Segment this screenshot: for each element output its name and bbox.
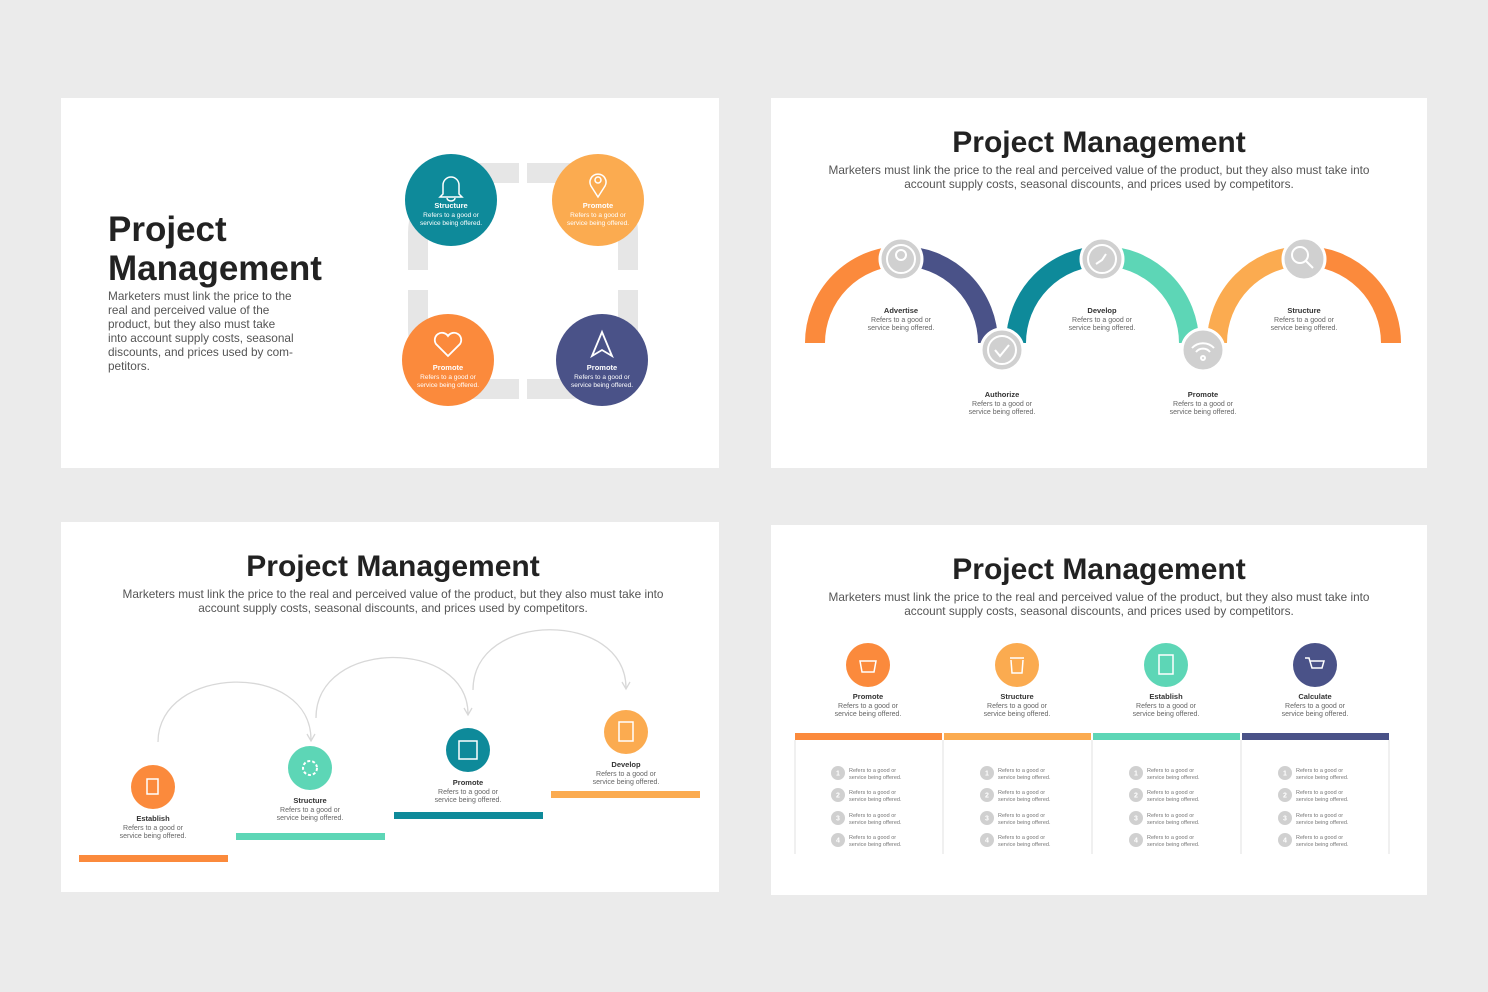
text block: product, but they also must take <box>108 317 276 331</box>
circle: structure: Refers to a good or <box>423 212 480 219</box>
circle: promote pin: service being offered. <box>567 220 629 227</box>
panel: arcs: Authorize <box>985 390 1019 399</box>
subtitle: Marketers must link the price to the real and perceived value of the product, but they also must take into <box>829 163 1370 177</box>
panel: table: Refers to a good or <box>987 703 1048 710</box>
panel: steps: Refers to a good or <box>280 807 341 814</box>
list items: service being offered. <box>1296 820 1349 826</box>
panel: arcs: Develop <box>1087 306 1117 315</box>
list items: service being offered. <box>1147 820 1200 826</box>
panel: arcs: Promote <box>1188 390 1218 399</box>
panel: steps: Refers to a good or <box>123 825 184 832</box>
panel: cycle: Management <box>108 249 322 288</box>
column icons <box>846 643 1337 687</box>
list items: 4 <box>985 838 989 844</box>
panel: arcs: Refers to a good or <box>972 401 1033 408</box>
panel: steps: Promote <box>453 778 483 787</box>
panel: arcs: service being offered. <box>1170 409 1236 416</box>
panel: table: Refers to a good or <box>1136 703 1197 710</box>
panel: table: service being offered. <box>1282 711 1348 718</box>
list items: service being offered. <box>849 797 902 803</box>
list items: service being offered. <box>849 820 902 826</box>
list items: Refers to a good or <box>998 813 1045 819</box>
step bars <box>79 855 228 862</box>
list items: 2 <box>836 792 840 800</box>
panel: steps: service being offered. <box>593 779 659 786</box>
subtitle: Marketers must link the price to the real and perceived value of the product, but they also must take into <box>123 587 664 601</box>
panel: arcs: service being offered. <box>969 409 1035 416</box>
list items: service being offered. <box>1147 842 1200 848</box>
list items: 2 <box>1134 792 1138 800</box>
list items: Refers to a good or <box>1147 813 1194 819</box>
list items: Refers to a good or <box>1147 768 1194 774</box>
list items: service being offered. <box>1147 797 1200 803</box>
list items: 3 <box>985 816 989 822</box>
panel: steps: service being offered. <box>435 797 501 804</box>
list items: service being offered. <box>1147 775 1200 781</box>
circle: structure: service being offered. <box>420 220 482 227</box>
circle: structure: Structure <box>434 201 468 210</box>
panel: arcs <box>771 98 1427 468</box>
panel: arcs: Refers to a good or <box>1274 317 1335 324</box>
grey ring <box>400 150 650 410</box>
circle: promote pin: Refers to a good or <box>570 212 627 219</box>
panel: table: Structure <box>1000 692 1034 701</box>
subtitle: account supply costs, seasonal discounts, and prices used by competitors. <box>904 177 1294 191</box>
panel: table: service being offered. <box>835 711 901 718</box>
list items: service being offered. <box>998 797 1051 803</box>
list items: Refers to a good or <box>849 790 896 796</box>
list items: service being offered. <box>1296 842 1349 848</box>
list items: Refers to a good or <box>1296 768 1343 774</box>
list items: 1 <box>836 770 840 778</box>
circle: promote pin: Promote <box>583 201 613 210</box>
panel: arcs: Refers to a good or <box>1173 401 1234 408</box>
panel: table: Refers to a good or <box>1285 703 1346 710</box>
panel: table: Calculate <box>1298 692 1332 701</box>
list items: Refers to a good or <box>998 790 1045 796</box>
subtitle: Marketers must link the price to the real and perceived value of the product, but they also must take into <box>829 590 1370 604</box>
list items: 3 <box>836 816 840 822</box>
circle: promote pin <box>552 154 644 246</box>
panel: table: Refers to a good or <box>838 703 899 710</box>
circle: structure <box>405 154 497 246</box>
panel: arcs: Refers to a good or <box>1072 317 1133 324</box>
list items: 4 <box>1134 838 1138 844</box>
panel: steps: service being offered. <box>277 815 343 822</box>
text block: Marketers must link the price to the <box>108 289 292 303</box>
list items: service being offered. <box>998 775 1051 781</box>
title: Project <box>108 210 227 249</box>
list items: 1 <box>1283 770 1287 778</box>
list items: service being offered. <box>1296 775 1349 781</box>
panel: table <box>771 525 1427 895</box>
list items: service being offered. <box>998 842 1051 848</box>
panel: steps <box>61 522 719 892</box>
list items: Refers to a good or <box>1296 790 1343 796</box>
panel: arcs: service being offered. <box>868 325 934 332</box>
panel: arcs: Refers to a good or <box>871 317 932 324</box>
list items: 2 <box>1283 792 1287 800</box>
list items: 1 <box>1134 770 1138 778</box>
icon circles <box>880 238 1325 371</box>
list items: Refers to a good or <box>998 835 1045 841</box>
title: Project Management <box>952 126 1246 159</box>
step circles <box>131 710 648 809</box>
panel: arcs: Structure <box>1287 306 1321 315</box>
list items: 3 <box>1134 816 1138 822</box>
list items: Refers to a good or <box>849 768 896 774</box>
list items: 1 <box>985 770 989 778</box>
circle: promote navigation: service being offered. <box>571 382 633 389</box>
labels: Advertise <box>884 306 918 315</box>
circle: promote navigation: Refers to a good or <box>574 374 631 381</box>
list items: Refers to a good or <box>849 835 896 841</box>
list items: service being offered. <box>849 775 902 781</box>
circle: promote heart: service being offered. <box>417 382 479 389</box>
circle: promote navigation <box>556 314 648 406</box>
panel: table: Establish <box>1149 692 1183 701</box>
circle: promote heart <box>402 314 494 406</box>
text block: petitors. <box>108 359 150 373</box>
arcs <box>815 256 1391 343</box>
list items: Refers to a good or <box>1296 835 1343 841</box>
panel: arcs: service being offered. <box>1069 325 1135 332</box>
arrows <box>158 630 630 742</box>
panel: cycle <box>61 98 719 468</box>
panel: steps: Structure <box>293 796 327 805</box>
subtitle: account supply costs, seasonal discounts, and prices used by competitors. <box>904 604 1294 618</box>
list items: service being offered. <box>849 842 902 848</box>
panel: steps: Develop <box>611 760 641 769</box>
list items: 4 <box>836 838 840 844</box>
title: Project Management <box>246 550 540 583</box>
subtitle: account supply costs, seasonal discounts, and prices used by competitors. <box>198 601 588 615</box>
list items: Refers to a good or <box>849 813 896 819</box>
header bars <box>795 733 942 740</box>
circle: promote heart: Refers to a good or <box>420 374 477 381</box>
circle: promote navigation: Promote <box>587 363 617 372</box>
list items: Refers to a good or <box>1296 813 1343 819</box>
list items: service being offered. <box>1296 797 1349 803</box>
title: Project Management <box>952 553 1246 586</box>
list items: 2 <box>985 792 989 800</box>
text block: into account supply costs, seasonal <box>108 331 294 345</box>
list items: service being offered. <box>998 820 1051 826</box>
text block: real and perceived value of the <box>108 303 270 317</box>
column labels: Promote <box>853 692 883 701</box>
list items <box>831 766 1349 848</box>
panel: arcs: service being offered. <box>1271 325 1337 332</box>
panel: table: service being offered. <box>1133 711 1199 718</box>
list items: Refers to a good or <box>1147 790 1194 796</box>
panel: steps: service being offered. <box>120 833 186 840</box>
list items: 3 <box>1283 816 1287 822</box>
list items: 4 <box>1283 838 1287 844</box>
panel: table: service being offered. <box>984 711 1050 718</box>
list items: Refers to a good or <box>998 768 1045 774</box>
list items: Refers to a good or <box>1147 835 1194 841</box>
step labels: Establish <box>136 814 170 823</box>
text block: discounts, and prices used by com- <box>108 345 293 359</box>
panel: steps: Refers to a good or <box>596 771 657 778</box>
panel: steps: Refers to a good or <box>438 789 499 796</box>
circle: promote heart: Promote <box>433 363 463 372</box>
